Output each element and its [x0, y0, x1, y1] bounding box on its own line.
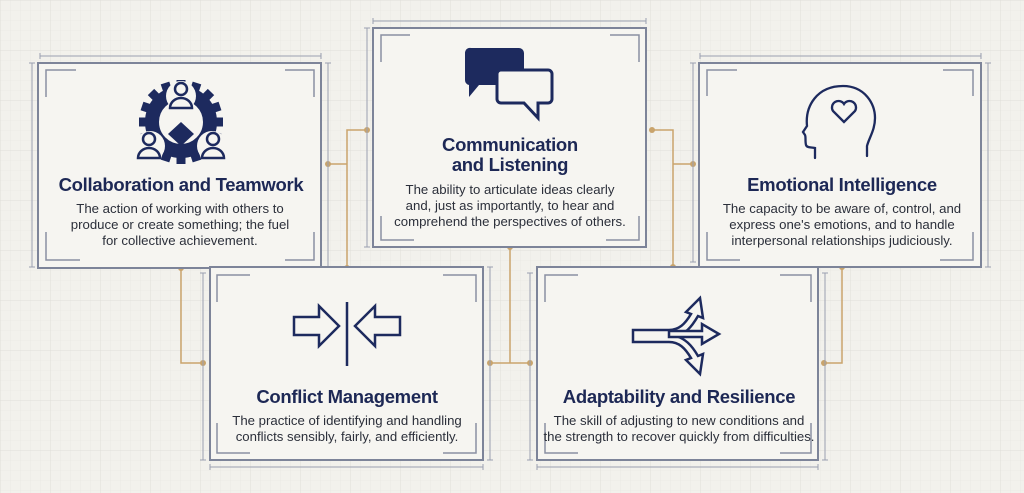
- text: express one's emotions, and to handle: [729, 217, 955, 232]
- title: Adaptability and Resilience: [563, 386, 795, 407]
- title: Conflict Management: [256, 386, 438, 407]
- panel: communication: [364, 18, 646, 247]
- icon: converging arrows: [294, 302, 400, 366]
- panel: conflict management: [200, 267, 493, 470]
- text: conflicts sensibly, fairly, and efficiently.: [236, 429, 458, 444]
- icon: gear with people: [135, 80, 227, 164]
- text: the strength to recover quickly from difficulties.: [544, 429, 814, 444]
- text: The action of working with others to: [76, 201, 284, 216]
- icon: head with heart: [803, 86, 875, 158]
- title: Emotional Intelligence: [747, 174, 937, 195]
- panel: collaboration: [29, 53, 331, 268]
- text: for collective achievement.: [102, 233, 258, 248]
- text: The practice of identifying and handling: [232, 413, 462, 428]
- title: and Listening: [452, 154, 568, 175]
- text: comprehend the perspectives of others.: [394, 214, 626, 229]
- text: produce or create something; the fuel: [71, 217, 289, 232]
- text: The ability to articulate ideas clearly: [406, 182, 615, 197]
- icon: diverging arrows: [633, 298, 719, 374]
- panel: adaptability: [527, 267, 828, 470]
- text: and, just as importantly, to hear and: [406, 198, 614, 213]
- text: The skill of adjusting to new conditions and: [554, 413, 804, 428]
- panel: emotional intelligence: [690, 53, 991, 267]
- connectors: [178, 127, 845, 366]
- text: The capacity to be aware of, control, and: [723, 201, 961, 216]
- title: Collaboration and Teamwork: [59, 174, 304, 195]
- icon: speech bubbles: [465, 48, 552, 118]
- title: Communication: [442, 134, 578, 155]
- text: interpersonal relationships judiciously.: [731, 233, 953, 248]
